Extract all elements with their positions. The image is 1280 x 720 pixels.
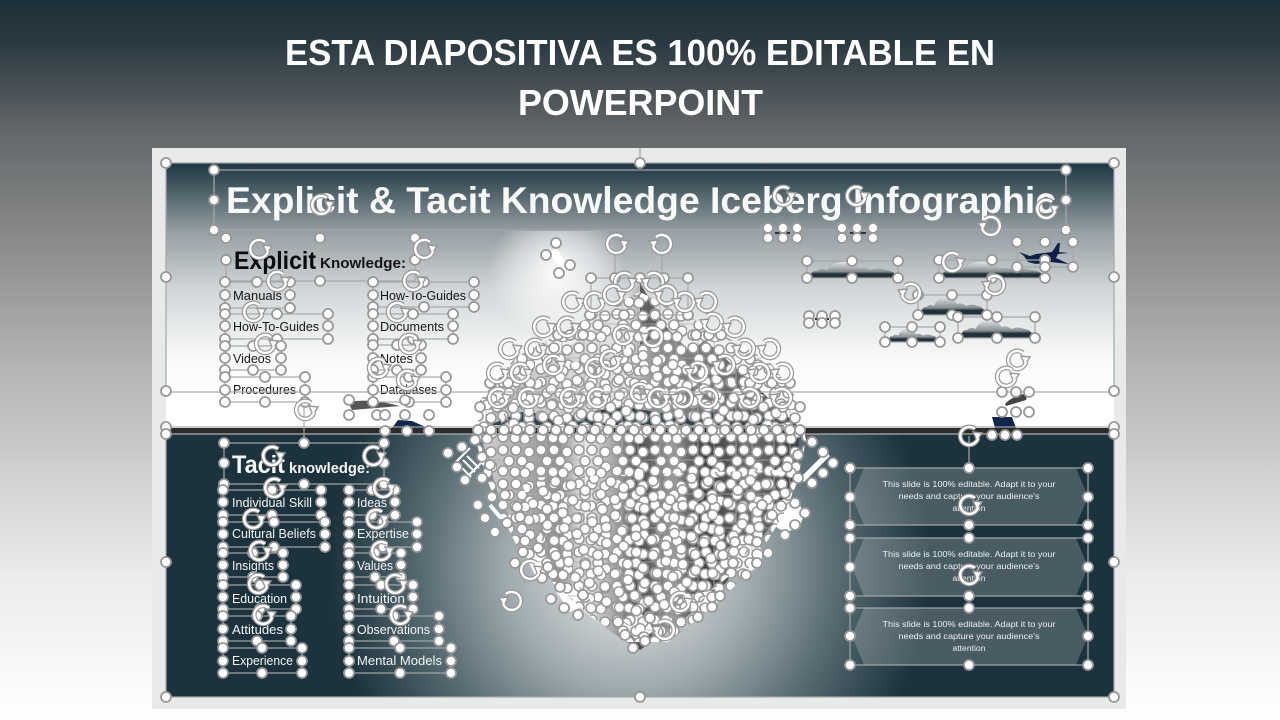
list: tacit right column: Mental Models (357, 654, 442, 668)
resize handles: explicit lists (220, 277, 479, 407)
callout: text banner 1: needs and capture your audience's (898, 491, 1040, 501)
list: tacit right column: Intuition (357, 592, 405, 606)
sky panel (166, 163, 1114, 392)
icon: white burst lower right (728, 538, 762, 572)
resize handles: clouds, plane, ships (344, 223, 1078, 440)
callout: text banner 2: This slide is 100% editable. Adapt it to your (882, 549, 1056, 559)
sea panel (166, 434, 1114, 697)
list: tacit left column: Education (232, 592, 287, 606)
icon: white burst bottom left (555, 585, 585, 612)
icon: white burst right (771, 499, 803, 531)
list: tacit left column: Insights (232, 559, 274, 573)
iceberg above water (480, 283, 800, 428)
resize handles: tacit lists (218, 438, 456, 678)
icon: smoke right (1005, 393, 1028, 406)
resize handles: text banners (845, 463, 1093, 670)
callout: text banner 2 (852, 538, 1088, 596)
list: tacit left column (232, 496, 316, 668)
iceberg below water (480, 434, 800, 650)
icon: white burst bottom right (690, 590, 715, 612)
heading: tacit knowledge: knowledge: (289, 460, 370, 477)
list: explicit left column: How-To-Guides (233, 320, 319, 334)
callout: text banner 3: needs and capture your audience's (898, 631, 1040, 641)
heading: explicit knowledge: Knowledge: (320, 255, 406, 272)
heading: explicit knowledge (234, 247, 406, 275)
icon: check mark (490, 505, 514, 517)
callout: text banner 2: attention (953, 573, 986, 583)
list: explicit right column: Documents (380, 320, 444, 334)
icon: airplane (1019, 243, 1069, 264)
icon: smoke left (348, 401, 400, 410)
list: explicit right column: Notes (380, 352, 413, 366)
title: Explicit & Tacit Knowledge Iceberg Infographic (226, 180, 1056, 221)
list: tacit left column: Individual Skill (232, 496, 312, 510)
heading: explicit knowledge: Explicit (234, 247, 317, 275)
panel: slide screenshot (152, 148, 1126, 709)
resize handles: slide frames and title (161, 158, 1119, 702)
callout: text banner 1 (852, 468, 1088, 525)
rotation handles (244, 187, 1059, 639)
icon: white burst lower left (527, 548, 550, 575)
list: tacit right column: Expertise (357, 527, 409, 541)
callout: text banner 2: needs and capture your audience's (898, 561, 1040, 571)
icon: white burst bottom (622, 612, 655, 642)
callout: text banner 3 (852, 608, 1088, 665)
waterline (166, 428, 1114, 434)
resize handles: iceberg edges (473, 273, 805, 435)
resize handles: iceberg icons (443, 435, 838, 653)
icon: capsule near moon (549, 248, 570, 273)
list: explicit right column: How-To-Guides (380, 289, 466, 303)
icon: ship left (392, 420, 428, 428)
list: tacit right column: Ideas (357, 496, 387, 510)
callout: text banner 3: This slide is 100% editable. Adapt it to your (882, 619, 1056, 629)
iceberg dark face (640, 283, 668, 345)
moon glow (489, 231, 625, 340)
list: explicit right column: Databases (380, 383, 437, 397)
callout: text banner 1: This slide is 100% editable. Adapt it to your (882, 479, 1056, 489)
list: tacit right column: Observations (357, 623, 430, 637)
headline: POWERPOINT (518, 82, 763, 123)
list: explicit left column: Videos (233, 352, 271, 366)
icon: white wrench shape (800, 452, 830, 482)
list: tacit left column: Experience (232, 654, 293, 668)
list: explicit left column: Manuals (233, 289, 282, 303)
icon: ship right (992, 417, 1016, 428)
headline (285, 32, 995, 123)
list: tacit left column: Attitudes (232, 623, 283, 637)
icon: ladder (456, 448, 482, 477)
list: explicit left column: Procedures (233, 383, 296, 397)
list: tacit right column: Values (357, 559, 393, 573)
list: explicit right column (380, 289, 466, 397)
list: explicit left column (233, 289, 319, 397)
list: tacit right column (357, 496, 442, 668)
callout: text banner 1: attention (953, 503, 986, 513)
iceberg shaded band (490, 406, 790, 425)
list: tacit left column: Cultural Beliefs (232, 527, 316, 541)
white horizon band (166, 392, 1114, 428)
callout: text banner 3: attention (953, 643, 986, 653)
clouds (775, 232, 1043, 342)
heading: tacit knowledge: Tacit (232, 451, 286, 479)
selection frames (166, 148, 1114, 697)
heading: tacit knowledge (232, 451, 370, 479)
iceberg selection handles mass (470, 285, 815, 650)
headline: ESTA DIAPOSITIVA ES 100% EDITABLE EN (285, 32, 995, 73)
